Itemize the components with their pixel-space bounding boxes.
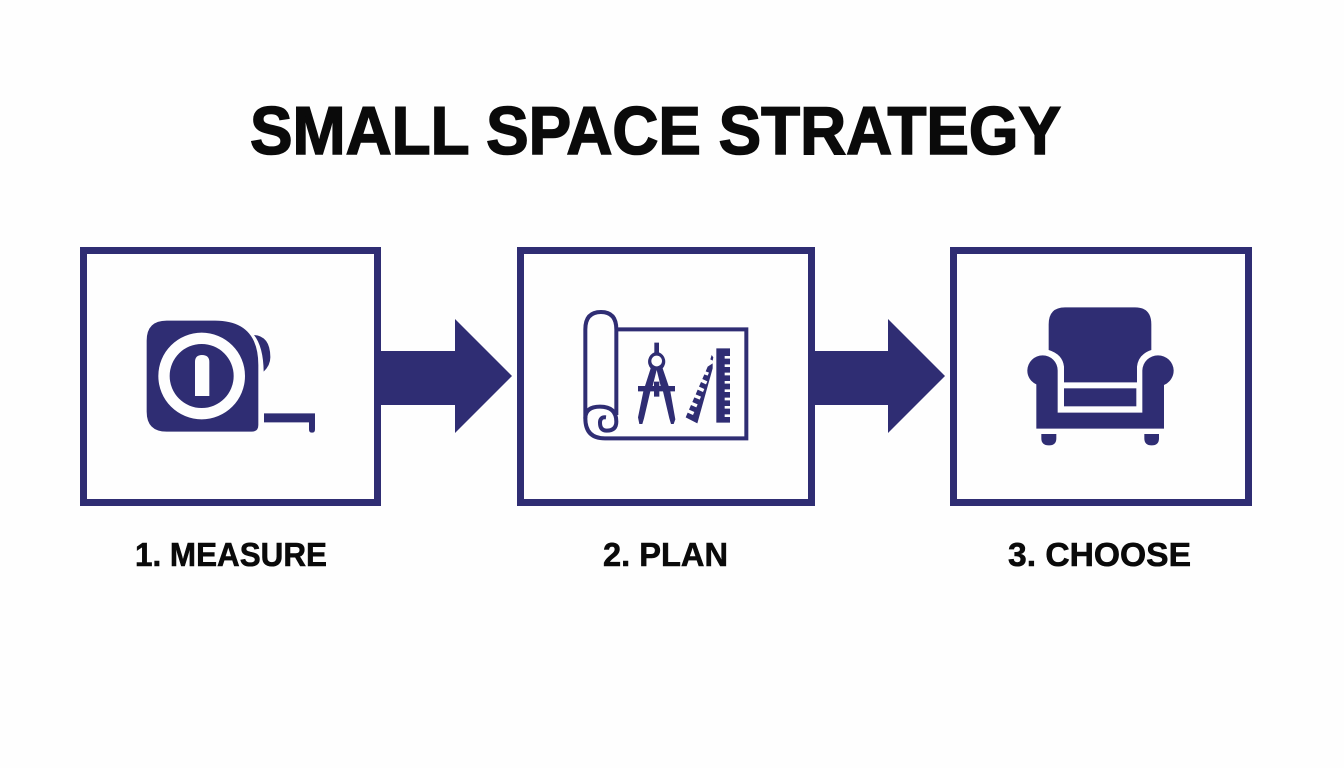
- arrow: measure to plan: [381, 319, 512, 433]
- icon: blueprint with compass and rulers: [585, 312, 746, 438]
- panel frame: measure: [84, 250, 378, 502]
- icon: tape measure: [147, 321, 315, 433]
- panel: step 3 choose: [954, 250, 1248, 502]
- arrow: plan to choose: [815, 319, 945, 433]
- panel frame: plan: [520, 250, 812, 502]
- panel frame: choose: [954, 250, 1248, 502]
- label: step 3: 3. CHOOSE: [1008, 536, 1191, 573]
- icon: armchair: [1027, 307, 1174, 445]
- panel: step 2 plan: [520, 250, 812, 502]
- label: step 2: 2. PLAN: [603, 536, 728, 573]
- title: SMALL SPACE STRATEGY: [250, 93, 1061, 169]
- panel: step 1 measure: [84, 250, 378, 502]
- label: step 1: 1. MEASURE: [135, 536, 327, 573]
